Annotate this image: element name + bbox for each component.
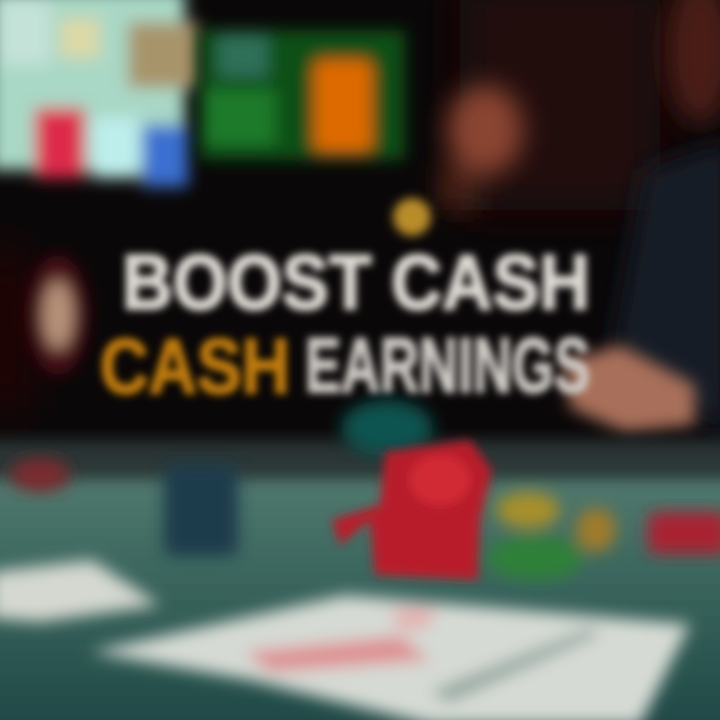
title: boost cash: BOOST CASH bbox=[122, 238, 590, 326]
yellow and green chips bbox=[487, 492, 616, 580]
blue glass bbox=[164, 464, 238, 556]
screen: left colourful panel bbox=[0, 0, 198, 187]
table rim bbox=[0, 440, 720, 478]
table surface bbox=[0, 476, 720, 720]
playing card left bbox=[0, 560, 160, 622]
dark red curtain bbox=[0, 0, 660, 410]
red chips at right bbox=[648, 512, 720, 554]
red chips at left edge bbox=[10, 458, 70, 492]
person: torso bbox=[612, 140, 720, 440]
title: cash: CASH bbox=[100, 322, 290, 410]
person: forearm bbox=[565, 345, 695, 432]
title: earnings: EARNINGS bbox=[305, 321, 590, 409]
teal chip bbox=[341, 400, 433, 456]
person: face and raised hand bbox=[440, 0, 720, 210]
red chip stack bbox=[332, 440, 492, 580]
playing cards centre bbox=[90, 595, 690, 720]
left lamp bbox=[28, 255, 88, 375]
yellow coin bbox=[393, 198, 431, 236]
screen: green panel with orange block bbox=[200, 30, 405, 160]
